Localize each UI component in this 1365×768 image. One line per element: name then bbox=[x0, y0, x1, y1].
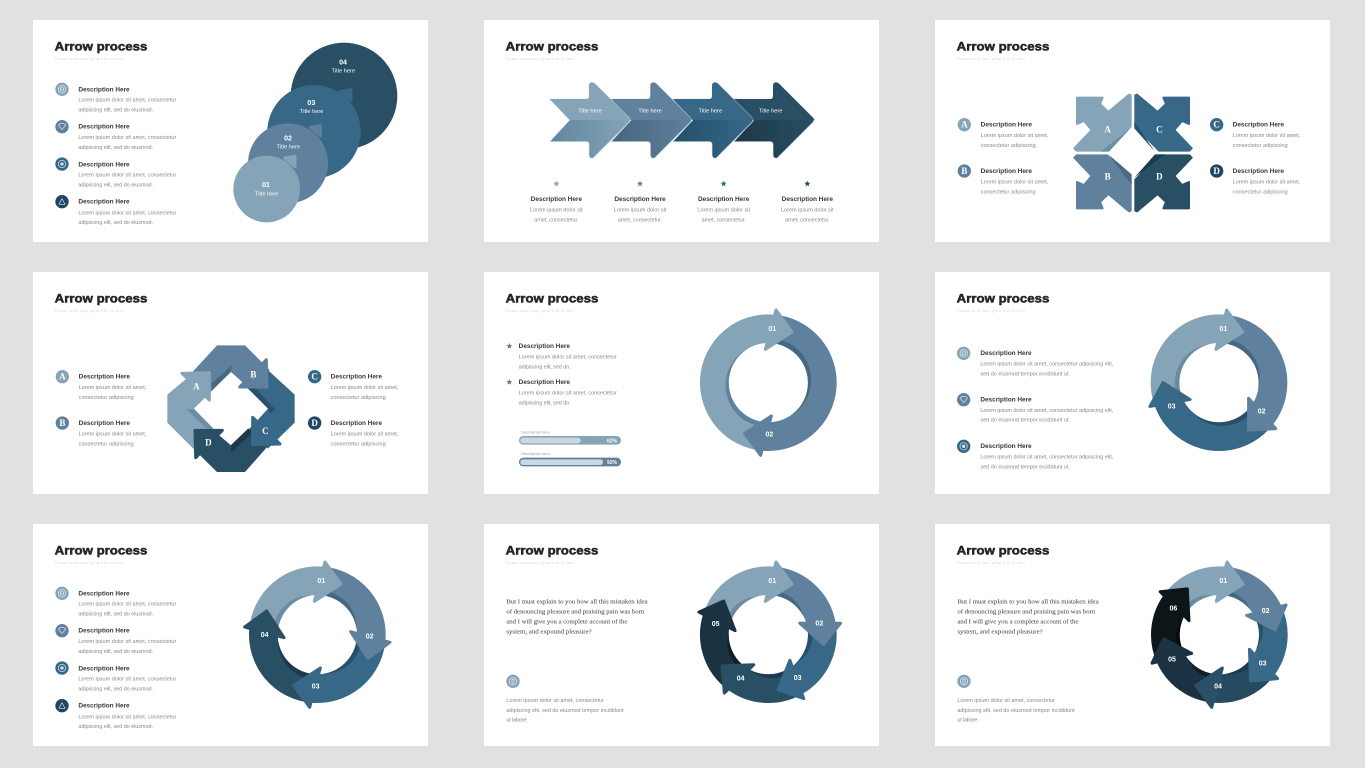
progress bar 92% bbox=[519, 452, 621, 466]
text block 3: Lorem ipsum dolor sit amet, consectetur bbox=[78, 173, 176, 179]
arrow 01: 01 bbox=[1219, 326, 1227, 333]
arrow 04: 04 bbox=[261, 632, 269, 639]
panel: octagon cycle bbox=[33, 272, 428, 494]
circle 03: Title here bbox=[300, 109, 323, 115]
title: Arrow process bbox=[55, 544, 147, 558]
arrow 4 bbox=[734, 82, 815, 158]
badge D with text bbox=[308, 416, 399, 447]
arrow 03 bbox=[768, 660, 812, 708]
title: Arrow process bbox=[506, 40, 598, 54]
column 2 bbox=[614, 181, 667, 223]
progress bar 62% bbox=[519, 430, 621, 445]
text block 1: adipiscing elit, sed do eiusmod. bbox=[78, 612, 153, 618]
arrow 03: 03 bbox=[1259, 661, 1267, 668]
title: Arrow process bbox=[506, 544, 598, 558]
badge B with text bbox=[56, 416, 147, 447]
progress bar 62%: Description here bbox=[521, 430, 550, 434]
serif paragraph: But I must explain to you how all this mistaken idea bbox=[506, 599, 648, 606]
serif paragraph: and I will give you a complete account of the bbox=[506, 618, 627, 625]
arrow 02 bbox=[1234, 398, 1282, 442]
arrow 01: 01 bbox=[1219, 578, 1227, 585]
badge D with text bbox=[1210, 164, 1301, 195]
note text: adipiscing elit, sed do eiusmod tempor incididunt bbox=[957, 708, 1075, 714]
subtitle: Please write your great title is here bbox=[957, 309, 1025, 313]
icon: target bbox=[957, 675, 971, 688]
subtitle: Please write your great title is here bbox=[506, 561, 574, 565]
arrow 03: 03 bbox=[1168, 404, 1176, 411]
badge A with text: Description Here bbox=[981, 122, 1032, 129]
badge C with text: Description Here bbox=[331, 374, 382, 381]
subtitle: Please write your great title is here bbox=[957, 561, 1025, 565]
column 2: Description Here bbox=[614, 196, 666, 203]
arrow 02 bbox=[1247, 596, 1294, 638]
arrow 04: 04 bbox=[737, 676, 745, 683]
column 2: Lorem ipsum dolor sit bbox=[614, 207, 667, 213]
badge B with text: consectetur adipiscing bbox=[79, 441, 134, 447]
badge C with text bbox=[308, 370, 399, 401]
serif paragraph: But I must explain to you how all this mistaken idea bbox=[957, 599, 1099, 606]
arrow 03 bbox=[1143, 375, 1190, 416]
text block 4: Description Here bbox=[78, 703, 130, 710]
badge C with text: C bbox=[1213, 120, 1220, 130]
badge C with text: C bbox=[311, 372, 318, 382]
arrow 01 bbox=[314, 562, 341, 601]
circle 04: 04 bbox=[339, 59, 347, 66]
badge D with text: Description Here bbox=[1233, 168, 1284, 175]
progress bar 92%: 92% bbox=[607, 460, 618, 466]
column 3: Lorem ipsum dolor sit bbox=[697, 207, 750, 213]
arrow 01: 01 bbox=[768, 326, 776, 333]
column 4: amet, consectetur. bbox=[785, 217, 830, 223]
serif paragraph: system, and expound pleasure? bbox=[957, 628, 1043, 635]
text block 4: adipiscing elit, sed do eiusmod. bbox=[78, 724, 153, 730]
badge B with text: Description Here bbox=[981, 168, 1032, 175]
tile letters: D bbox=[1156, 172, 1163, 182]
text block 3: adipiscing elit, sed do eiusmod. bbox=[78, 183, 153, 189]
text block 1: Description Here bbox=[78, 590, 130, 597]
arrow 05: 05 bbox=[1168, 657, 1176, 664]
badge A with text: A bbox=[961, 120, 968, 130]
text block 3 bbox=[78, 665, 176, 693]
arrow 1 bbox=[550, 82, 631, 158]
title: Arrow process bbox=[506, 292, 598, 306]
arrow 01 bbox=[765, 310, 792, 349]
text block 2 bbox=[78, 628, 176, 655]
badge C with text: Lorem ipsum dolor sit amet, bbox=[331, 385, 399, 391]
badge D with text: Description Here bbox=[331, 420, 382, 427]
column 4: Description Here bbox=[782, 196, 833, 203]
icon: ring bbox=[55, 157, 69, 171]
text block 4: Lorem ipsum dolor sit amet, consectetur bbox=[78, 210, 176, 216]
star item 2: Lorem ipsum dolor sit amet, consectetur bbox=[519, 390, 617, 396]
text block 1: sed do eiusmod tempor incididunt ut. bbox=[980, 371, 1070, 377]
panel: horizontal chevron arrows bbox=[484, 20, 879, 242]
column 3: Description Here bbox=[698, 196, 750, 203]
arrow 01 bbox=[1216, 310, 1243, 349]
text block 4 bbox=[78, 199, 176, 226]
octagon bodies bbox=[167, 345, 295, 472]
text block 1: Description Here bbox=[980, 350, 1032, 357]
star item 2: adipiscing elit, sed do. bbox=[519, 400, 571, 406]
badge A with text: A bbox=[59, 372, 66, 382]
text block 1 bbox=[78, 86, 176, 114]
text block 3: Description Here bbox=[78, 161, 130, 168]
circle 02: Title here bbox=[277, 145, 300, 151]
badge C with text bbox=[1210, 118, 1301, 149]
circle 03: 03 bbox=[307, 100, 315, 107]
arrowhead D bbox=[195, 430, 222, 458]
subtitle: Please write your great title is here bbox=[55, 561, 123, 565]
icon: target bbox=[506, 675, 520, 688]
text block 4: adipiscing elit, sed do eiusmod. bbox=[78, 220, 153, 226]
text block 2: Lorem ipsum dolor sit amet, consectetur bbox=[78, 135, 176, 141]
subtitle: Please write your great title is here bbox=[55, 309, 123, 313]
badge A with text bbox=[56, 370, 147, 401]
text block 3: sed do eiusmod tempor incididunt ut. bbox=[980, 465, 1070, 471]
text block 1: Lorem ipsum dolor sit amet, consectetur bbox=[78, 602, 176, 608]
note text: Lorem ipsum dolor sit amet, consectetur bbox=[957, 698, 1055, 704]
subtitle: Please write your great title is here bbox=[55, 57, 123, 61]
badge B with text: B bbox=[961, 166, 967, 176]
badge A with text: Lorem ipsum dolor sit amet, bbox=[981, 133, 1049, 139]
arrow titles: Title here bbox=[699, 109, 722, 115]
arrow 05 bbox=[697, 596, 741, 631]
tile D bbox=[1134, 154, 1192, 211]
panel: six-arrow ring bbox=[935, 524, 1330, 746]
panel: two-arrow ring bbox=[484, 272, 879, 494]
text block 1 bbox=[78, 590, 176, 618]
badge B with text: consectetur adipiscing bbox=[981, 189, 1036, 195]
arrow 04: 04 bbox=[1214, 684, 1222, 691]
column 1: Description Here bbox=[531, 196, 582, 203]
badge C with text: Description Here bbox=[1233, 122, 1284, 129]
text block 1: Description Here bbox=[78, 86, 130, 93]
arrow 01 bbox=[765, 562, 792, 601]
column 4 bbox=[781, 181, 834, 223]
star item 1: Description Here bbox=[519, 343, 570, 350]
column 2: amet, consectetur. bbox=[618, 217, 663, 223]
text block 2 bbox=[78, 124, 176, 151]
subtitle: Please write your great title is here bbox=[957, 57, 1025, 61]
tile A bbox=[1074, 95, 1131, 152]
arrow titles: Title here bbox=[638, 109, 662, 115]
icon: gem bbox=[55, 624, 69, 637]
arrow 03: 03 bbox=[312, 684, 320, 691]
arrow 06 bbox=[1155, 578, 1202, 621]
panel: three-arrow ring bbox=[935, 272, 1330, 494]
ring chart bbox=[245, 562, 390, 707]
tile letters: C bbox=[1156, 124, 1163, 134]
note text bbox=[506, 698, 624, 724]
note text bbox=[957, 698, 1075, 724]
circle 02 bbox=[248, 123, 328, 203]
serif paragraph: and I will give you a complete account of the bbox=[957, 618, 1078, 625]
column 1: amet, consectetur. bbox=[534, 217, 579, 223]
text block 4: Lorem ipsum dolor sit amet, consectetur bbox=[78, 714, 176, 720]
badge C with text: consectetur adipiscing bbox=[1233, 143, 1288, 149]
arrow 05 bbox=[1144, 630, 1192, 673]
text block 2: sed do eiusmod tempor incididunt ut. bbox=[980, 418, 1070, 424]
circle 02: 02 bbox=[284, 135, 292, 142]
panel: four inward arrows bbox=[935, 20, 1330, 242]
arrow 04 bbox=[1196, 668, 1222, 707]
arrow titles: Title here bbox=[578, 109, 602, 115]
circle 01: 01 bbox=[262, 182, 270, 189]
badge B with text: Lorem ipsum dolor sit amet, bbox=[79, 431, 147, 437]
subtitle: Please write your great title is here bbox=[506, 309, 574, 313]
text block 1: adipiscing elit, sed do eiusmod. bbox=[78, 108, 153, 114]
arrow 01: 01 bbox=[317, 578, 325, 585]
arrow 02: 02 bbox=[1258, 409, 1266, 416]
title: Arrow process bbox=[957, 40, 1049, 54]
icon: gem bbox=[55, 120, 69, 133]
note text: ut labore. bbox=[957, 718, 979, 724]
title: Arrow process bbox=[55, 40, 147, 54]
star item 1 bbox=[506, 343, 617, 370]
icon: target bbox=[957, 347, 970, 360]
arrow 03 bbox=[294, 668, 320, 707]
arrow 06: 06 bbox=[1169, 606, 1177, 613]
subtitle: Please write your great title is here bbox=[506, 57, 574, 61]
column 4: Lorem ipsum dolor sit bbox=[781, 207, 834, 213]
panel: concentric circles process bbox=[33, 20, 428, 242]
arrow 02 bbox=[745, 416, 773, 455]
ring chart bbox=[1143, 307, 1295, 458]
star item 1: adipiscing elit, sed do. bbox=[519, 364, 571, 370]
icon: ring bbox=[957, 440, 970, 453]
arrow 02 bbox=[800, 613, 845, 649]
badge A with text: consectetur adipiscing bbox=[79, 395, 134, 401]
text block 1: Lorem ipsum dolor sit amet, consectetur bbox=[78, 98, 176, 104]
progress bar 62%: 62% bbox=[607, 438, 618, 444]
badge D with text: D bbox=[1213, 166, 1220, 176]
arrow 2 bbox=[611, 82, 692, 158]
arrow 04 bbox=[711, 651, 754, 698]
text block 2: Description Here bbox=[980, 396, 1032, 403]
arrowhead B: B bbox=[250, 369, 256, 379]
text block 3: Lorem ipsum dolor sit amet, consectetur bbox=[78, 677, 176, 683]
badge B with text: B bbox=[59, 418, 65, 428]
tile letters bbox=[1104, 124, 1163, 182]
ring chart bbox=[693, 559, 845, 710]
arrowhead B bbox=[240, 360, 267, 387]
tile B bbox=[1074, 154, 1132, 211]
panel: five-arrow ring bbox=[484, 524, 879, 746]
star item 2 bbox=[506, 379, 617, 406]
serif paragraph bbox=[957, 599, 1099, 635]
text block 3: Lorem ipsum dolor sit amet, consectetur adipiscing elit, bbox=[980, 455, 1114, 461]
icon: target bbox=[55, 83, 69, 96]
text block 2: adipiscing elit, sed do eiusmod. bbox=[78, 649, 153, 655]
arrowhead A: A bbox=[193, 382, 200, 392]
circle 01 bbox=[233, 156, 300, 222]
arrow 01: 01 bbox=[768, 578, 776, 585]
progress bar 92%: Description here bbox=[521, 452, 550, 456]
text block 2: Lorem ipsum dolor sit amet, consectetur adipiscing elit, bbox=[980, 408, 1114, 414]
ring chart bbox=[710, 310, 827, 455]
badge B with text: Lorem ipsum dolor sit amet, bbox=[981, 179, 1049, 185]
badge C with text: consectetur adipiscing bbox=[331, 395, 386, 401]
arrow 3 bbox=[673, 82, 754, 158]
badge A with text: Lorem ipsum dolor sit amet, bbox=[79, 385, 147, 391]
arrow titles: Title here bbox=[759, 109, 782, 115]
panel: four-arrow ring bbox=[33, 524, 428, 746]
icon: target bbox=[55, 587, 69, 600]
arrow 02: 02 bbox=[366, 634, 374, 641]
badge B with text bbox=[958, 164, 1049, 195]
badge B with text: Description Here bbox=[79, 420, 130, 427]
column 1 bbox=[530, 181, 583, 223]
badge D with text: consectetur adipiscing bbox=[331, 441, 386, 447]
arrowhead D: D bbox=[205, 437, 212, 447]
badge C with text: Lorem ipsum dolor sit amet, bbox=[1233, 133, 1301, 139]
icon: gem bbox=[957, 393, 970, 406]
title: Arrow process bbox=[957, 292, 1049, 306]
text block 2: Lorem ipsum dolor sit amet, consectetur bbox=[78, 639, 176, 645]
star item 2: Description Here bbox=[519, 379, 570, 386]
star item 1: Lorem ipsum dolor sit amet, consectetur bbox=[519, 354, 617, 360]
badge D with text: D bbox=[311, 418, 318, 428]
column 1: Lorem ipsum dolor sit bbox=[530, 207, 583, 213]
text block 2: Description Here bbox=[78, 124, 130, 131]
badge D with text: Lorem ipsum dolor sit amet, bbox=[1233, 179, 1301, 185]
badge D with text: Lorem ipsum dolor sit amet, bbox=[331, 431, 399, 437]
text block 3: Description Here bbox=[980, 443, 1032, 450]
text block 2 bbox=[980, 396, 1114, 424]
text block 3 bbox=[980, 443, 1114, 471]
note text: adipiscing elit, sed do eiusmod tempor incididunt bbox=[506, 708, 624, 714]
column 3 bbox=[697, 181, 750, 223]
arrow 02: 02 bbox=[815, 620, 823, 627]
arrow titles bbox=[578, 109, 782, 115]
arrow 03 bbox=[1236, 649, 1283, 692]
note text: ut labore. bbox=[506, 718, 528, 724]
arrowhead C: C bbox=[262, 426, 269, 436]
circle 04 bbox=[291, 43, 397, 149]
arrowhead C bbox=[253, 417, 280, 445]
badge A with text: consectetur adipiscing bbox=[981, 143, 1036, 149]
arrow 02: 02 bbox=[765, 432, 773, 439]
icon: triangle bbox=[55, 195, 69, 208]
ring chart bbox=[1144, 559, 1295, 710]
arrowhead A bbox=[182, 373, 209, 400]
badge D with text: consectetur adipiscing bbox=[1233, 189, 1288, 195]
circle 03 bbox=[267, 85, 361, 178]
text block 3: adipiscing elit, sed do eiusmod. bbox=[78, 687, 153, 693]
text block 3: Description Here bbox=[78, 665, 130, 672]
text block 1 bbox=[980, 350, 1114, 377]
title: Arrow process bbox=[55, 292, 147, 306]
serif paragraph: system, and expound pleasure? bbox=[506, 628, 592, 635]
column 3: amet, consectetur. bbox=[702, 217, 746, 223]
arrow 02: 02 bbox=[1262, 608, 1270, 615]
circle 01: Title here bbox=[255, 191, 278, 197]
tile C bbox=[1134, 95, 1192, 152]
arrow 02 bbox=[351, 632, 390, 658]
circle 04: Title here bbox=[332, 69, 355, 75]
tile letters: A bbox=[1104, 124, 1111, 134]
arrow 05: 05 bbox=[712, 621, 720, 628]
text block 2: adipiscing elit, sed do eiusmod. bbox=[78, 145, 153, 151]
arrow 03: 03 bbox=[794, 675, 802, 682]
text block 3 bbox=[78, 161, 176, 189]
badge A with text bbox=[958, 118, 1049, 149]
arrow 01 bbox=[1216, 562, 1243, 601]
serif paragraph: of denouncing pleasure and praising pain was born bbox=[506, 609, 645, 616]
icon: ring bbox=[55, 661, 69, 675]
text block 4: Description Here bbox=[78, 199, 130, 206]
icon: triangle bbox=[55, 699, 69, 712]
serif paragraph: of denouncing pleasure and praising pain was born bbox=[957, 609, 1096, 616]
title: Arrow process bbox=[957, 544, 1049, 558]
note text: Lorem ipsum dolor sit amet, consectetur bbox=[506, 698, 604, 704]
text block 1: Lorem ipsum dolor sit amet, consectetur adipiscing elit, bbox=[980, 362, 1114, 368]
serif paragraph bbox=[506, 599, 648, 635]
tile letters: B bbox=[1105, 172, 1111, 182]
badge A with text: Description Here bbox=[79, 374, 130, 381]
text block 2: Description Here bbox=[78, 628, 130, 635]
text block 4 bbox=[78, 703, 176, 730]
arrow 04 bbox=[245, 611, 284, 639]
